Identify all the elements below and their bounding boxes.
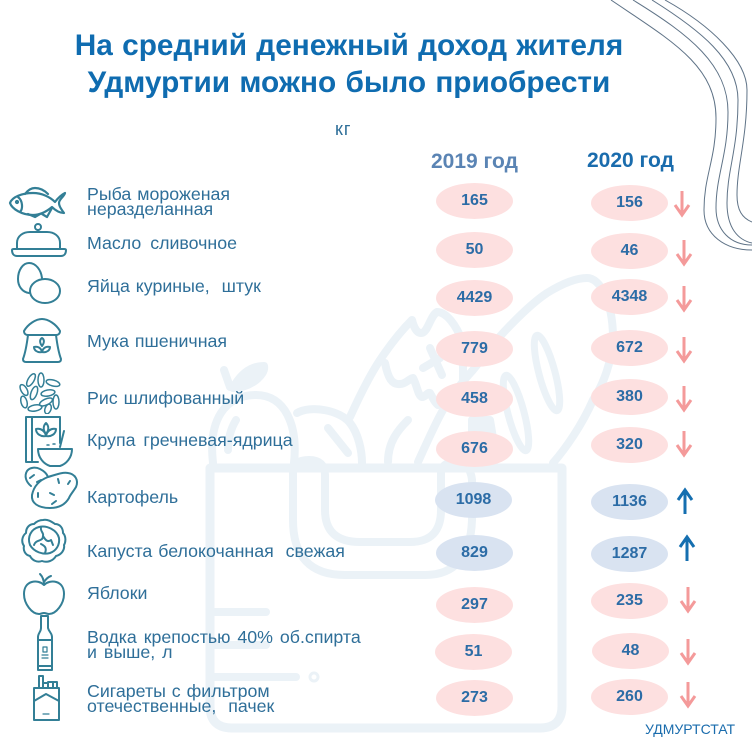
value 2019: fish — [436, 183, 513, 219]
arrow: down — [676, 286, 692, 312]
value 2019: potato — [435, 482, 512, 518]
arrow: up — [678, 534, 696, 561]
value 2020: fish — [591, 185, 668, 221]
value 2020: apples — [591, 583, 668, 619]
column heading: 2019: 2019 год — [431, 150, 518, 173]
row label: rice: Рис шлифованный — [87, 388, 244, 408]
value 2019: cabbage — [436, 535, 513, 571]
value 2019: cigarettes — [436, 680, 513, 716]
arrow: down — [676, 337, 692, 364]
icon: potatoes — [24, 466, 78, 509]
value 2019: buckwheat: 676 — [461, 440, 488, 457]
value 2019: eggs: 4429 — [457, 289, 492, 306]
value 2020: flour: 672 — [616, 339, 643, 356]
icon: apple — [23, 573, 65, 615]
title — [75, 29, 623, 99]
column heading: 2020: 2020 год — [587, 149, 674, 172]
row label: eggs: Яйца куриные, штук — [87, 276, 261, 296]
icon: butter dish — [11, 223, 67, 257]
value 2020: eggs — [591, 279, 668, 315]
value 2020: rice: 380 — [616, 388, 643, 405]
value 2020: apples: 235 — [616, 592, 643, 609]
icon: fish — [8, 186, 66, 218]
row label: cigarettes: Сигареты с фильтром отечественные, пачек — [87, 681, 274, 716]
icon: flour sack — [22, 318, 62, 363]
unit label: кг — [335, 119, 351, 139]
value 2019: cigarettes: 273 — [461, 689, 488, 706]
arrow: up — [676, 488, 694, 514]
value 2020: cabbage: 1287 — [612, 545, 647, 562]
value 2020: potato — [591, 484, 668, 520]
arrow: down — [676, 431, 692, 458]
arrow: down — [676, 240, 692, 266]
arrow: down — [680, 682, 696, 708]
value 2020: potato: 1136 — [612, 493, 647, 510]
value 2020: eggs: 4348 — [612, 288, 647, 305]
value 2019: butter — [436, 232, 513, 268]
arrow: down — [674, 191, 690, 218]
value 2020: cabbage — [591, 536, 668, 572]
value 2020: butter — [591, 233, 668, 269]
value 2019: rice: 458 — [461, 390, 488, 407]
value 2020: buckwheat — [591, 427, 668, 463]
value 2019: vodka — [435, 634, 512, 670]
title: Удмуртии можно было приобрести — [88, 66, 610, 99]
value 2019: eggs — [436, 280, 513, 316]
icon: rice — [19, 372, 60, 414]
value 2019: potato: 1098 — [456, 491, 491, 508]
value 2020: rice — [591, 379, 668, 415]
arrow: down — [680, 639, 696, 666]
icon: cabbage — [21, 518, 66, 563]
value 2020: flour — [591, 330, 668, 366]
value 2020: buckwheat: 320 — [616, 436, 643, 453]
icon: vodka bottle — [37, 615, 53, 671]
value 2020: cigarettes: 260 — [616, 688, 643, 705]
icon: eggs — [17, 262, 61, 304]
arrow: down — [680, 587, 696, 614]
row label: butter: Масло сливочное — [87, 233, 237, 253]
value 2019: fish: 165 — [461, 192, 488, 209]
row label: vodka: Водка крепостью 40% об.спирта и выше, л — [87, 627, 361, 662]
arrow: down — [676, 386, 692, 412]
value 2019: buckwheat — [436, 431, 513, 467]
title: На средний денежный доход жителя — [75, 29, 623, 62]
value 2020: fish: 156 — [616, 194, 643, 211]
value 2020: cigarettes — [591, 679, 668, 715]
row label: cabbage: Капуста белокочанная свежая — [87, 541, 345, 561]
value 2020: vodka: 48 — [622, 642, 639, 659]
value 2020: butter: 46 — [621, 242, 638, 259]
source label: УДМУРТСТАТ — [645, 721, 735, 737]
value 2019: apples — [436, 587, 513, 623]
value 2019: apples: 297 — [461, 596, 488, 613]
value 2020: vodka — [592, 633, 669, 669]
value 2019: flour: 779 — [461, 340, 488, 357]
icon: cigarette pack — [33, 675, 60, 721]
row label: apples: Яблоки — [87, 583, 147, 603]
row label: flour: Мука пшеничная — [87, 331, 227, 351]
value 2019: cabbage: 829 — [461, 544, 488, 561]
value 2019: butter: 50 — [466, 241, 483, 258]
icon: buckwheat box — [25, 416, 73, 467]
row label: buckwheat: Крупа гречневая-ядрица — [87, 430, 293, 450]
row label: fish: Рыба мороженая неразделанная — [87, 184, 230, 219]
value 2019: flour — [436, 331, 513, 367]
row label: potato: Картофель — [87, 487, 178, 507]
value 2019: vodka: 51 — [465, 643, 482, 660]
value 2019: rice — [436, 381, 513, 417]
